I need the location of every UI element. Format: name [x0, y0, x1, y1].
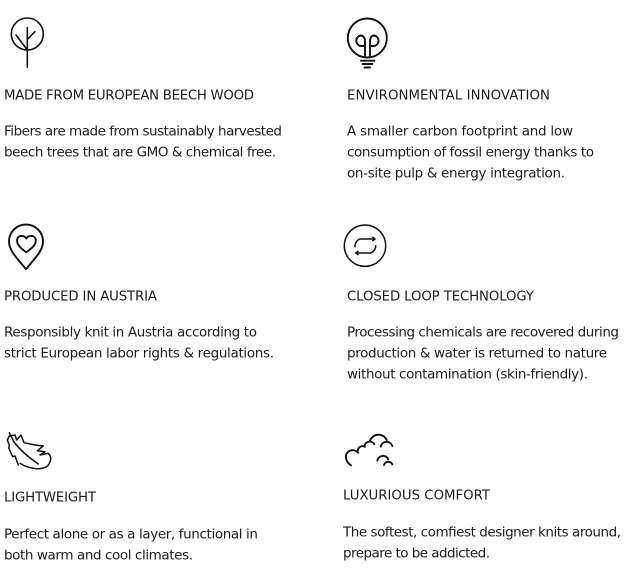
- text: innovation description: on-site pulp & energy integration.: [347, 166, 565, 182]
- panel: European beech wood: [4, 18, 282, 160]
- text: Austria description: Responsibly knit in Austria according to: [4, 324, 257, 340]
- text: lightweight description: Perfect alone or as a layer, functional in: [4, 526, 258, 542]
- heading: environmental innovation: ENVIRONMENTAL INNOVATION: [347, 88, 550, 104]
- icon: clouds: [346, 435, 392, 465]
- panel: lightweight: [4, 433, 258, 564]
- panel: luxurious comfort: [342, 435, 621, 562]
- text: innovation description: A smaller carbon footprint and low: [347, 124, 573, 140]
- text: closed loop description: without contamination (skin-friendly).: [347, 366, 588, 382]
- text: beech wood description: Fibers are made from sustainably harvested: [4, 124, 282, 140]
- text: comfort description: [342, 524, 621, 562]
- icon: map pin with heart: [9, 224, 43, 269]
- panel: environmental innovation: [347, 18, 594, 182]
- icon: feather: [7, 433, 51, 469]
- text: innovation description: consumption of fossil energy thanks to: [347, 144, 594, 160]
- heading: closed loop technology: CLOSED LOOP TECHNOLOGY: [347, 290, 535, 304]
- text: beech wood description: [4, 124, 282, 160]
- icon: closed loop arrows: [344, 225, 386, 266]
- text: closed loop description: [347, 324, 619, 382]
- text: comfort description: prepare to be addicted.: [343, 546, 490, 562]
- text: Austria description: [4, 324, 274, 362]
- text: closed loop description: Processing chemicals are recovered during: [347, 324, 619, 340]
- icon: light bulb: [348, 18, 387, 68]
- text: closed loop description: production & water is returned to nature: [347, 346, 607, 362]
- text: comfort description: The softest, comfiest designer knits around,: [342, 524, 621, 540]
- heading: produced in Austria: PRODUCED IN AUSTRIA: [4, 290, 157, 304]
- text: Austria description: strict European labor rights & regulations.: [4, 346, 274, 362]
- heading: lightweight: LIGHTWEIGHT: [4, 490, 97, 506]
- panel: closed loop technology: [344, 225, 619, 382]
- text: lightweight description: [4, 526, 258, 564]
- icon: tree: [11, 18, 43, 67]
- heading: made from European beech wood: MADE FROM EUROPEAN BEECH WOOD: [4, 88, 254, 104]
- text: beech wood description: beech trees that are GMO & chemical free.: [4, 144, 276, 160]
- text: lightweight description: both warm and cool climates.: [4, 548, 193, 564]
- text: innovation description: [347, 124, 594, 182]
- heading: luxurious comfort: LUXURIOUS COMFORT: [343, 488, 491, 504]
- panel: produced in Austria: [4, 224, 274, 362]
